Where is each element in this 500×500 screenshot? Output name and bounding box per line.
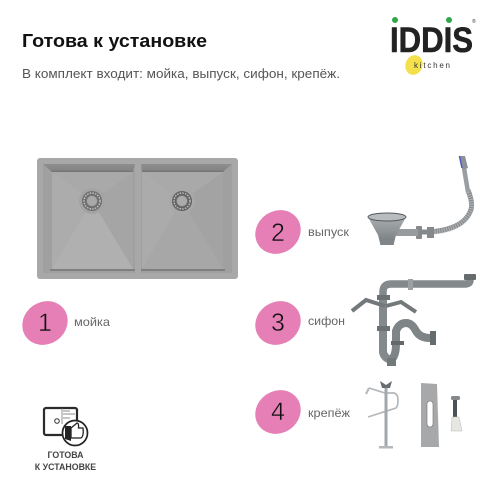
drain circle bbox=[55, 419, 59, 423]
plate slot bbox=[427, 401, 433, 427]
badge 3 with label bbox=[247, 292, 345, 354]
badge 4: 4 bbox=[271, 398, 285, 426]
logo kitchen text: kitchen bbox=[414, 61, 450, 70]
thumb up bbox=[71, 423, 83, 438]
label: выпуск: выпуск bbox=[308, 225, 350, 239]
frame divider bbox=[61, 408, 63, 424]
caption line 1: ГОТОВА bbox=[48, 450, 84, 460]
badge 2 with label bbox=[247, 201, 350, 263]
caption line 2: К УСТАНОВКЕ bbox=[35, 462, 96, 472]
illustration: siphon bbox=[352, 274, 476, 366]
trap outlet collar bbox=[430, 331, 436, 345]
overflow head bbox=[459, 156, 468, 170]
right bowl top wall bbox=[141, 164, 232, 172]
outlet bottom bbox=[380, 240, 394, 245]
overflow blue edge bbox=[460, 156, 462, 168]
vertical collars bbox=[377, 295, 390, 331]
left bowl walls bbox=[43, 164, 135, 273]
logo: iddis kitchen bbox=[390, 17, 476, 77]
thumb circle bbox=[62, 420, 88, 446]
frame ruler bbox=[63, 411, 75, 418]
outlet body bbox=[369, 219, 405, 243]
pipe collar bbox=[408, 279, 413, 290]
left bowl top wall bbox=[43, 164, 135, 172]
badge 1: 1 bbox=[38, 309, 52, 337]
badge 2: 2 bbox=[271, 219, 285, 247]
title: Готова к установке bbox=[22, 30, 207, 51]
left drain bbox=[79, 188, 105, 214]
S trap bbox=[391, 323, 434, 360]
sink rim bbox=[37, 158, 238, 279]
badge 1 with label bbox=[14, 292, 110, 354]
trap bottom cap bbox=[387, 358, 396, 366]
bowl bottom edges bbox=[50, 269, 225, 271]
bolt shaft bbox=[453, 398, 457, 417]
clip foot bbox=[379, 446, 393, 448]
icon: ready to install bbox=[44, 408, 88, 446]
right drain bbox=[169, 188, 195, 214]
top pipe end cap bbox=[464, 274, 476, 280]
panel: sink photo bbox=[37, 158, 238, 279]
subtitle text: В комплект входит: мойка, выпуск, сифон, крепёж. bbox=[22, 66, 340, 81]
badge 3: 3 bbox=[271, 309, 285, 337]
icon caption bbox=[35, 450, 96, 472]
plastic anchor bbox=[451, 417, 462, 431]
pipe couplings bbox=[416, 226, 434, 239]
label: крепёж: крепёж bbox=[308, 406, 350, 420]
left inlet branch bbox=[352, 300, 385, 311]
clip handle bbox=[366, 388, 369, 394]
bolt head bbox=[451, 396, 460, 400]
illustration: fasteners bbox=[366, 381, 462, 448]
vertical pipe bbox=[383, 298, 391, 360]
logo green dots bbox=[392, 17, 452, 23]
label: сифон: сифон bbox=[308, 314, 345, 328]
illustration: outlet drain bbox=[368, 156, 472, 245]
trap collar bbox=[391, 341, 404, 345]
outlet flange bbox=[368, 213, 406, 221]
right inlet branch bbox=[386, 302, 416, 312]
label: мойка: мойка bbox=[74, 315, 110, 329]
clip wire bbox=[368, 388, 398, 417]
logo registered mark: ® bbox=[472, 18, 476, 25]
thumb cuff bbox=[65, 426, 71, 441]
logo yellow blob bbox=[403, 53, 425, 77]
top horizontal pipe bbox=[383, 280, 470, 300]
overflow tube bbox=[464, 168, 468, 192]
right bowl walls bbox=[141, 164, 232, 273]
right bowl floor bbox=[142, 172, 223, 269]
sink frame bbox=[44, 408, 77, 435]
overflow hose bbox=[400, 190, 472, 232]
badge 4 with label bbox=[247, 381, 350, 443]
clip head bbox=[380, 381, 392, 388]
outlet pipe bbox=[396, 229, 418, 236]
clip screw bbox=[384, 385, 388, 447]
metal plate bbox=[421, 383, 439, 447]
left bowl floor bbox=[52, 172, 133, 269]
logo wordmark: IDDIS bbox=[390, 21, 473, 60]
